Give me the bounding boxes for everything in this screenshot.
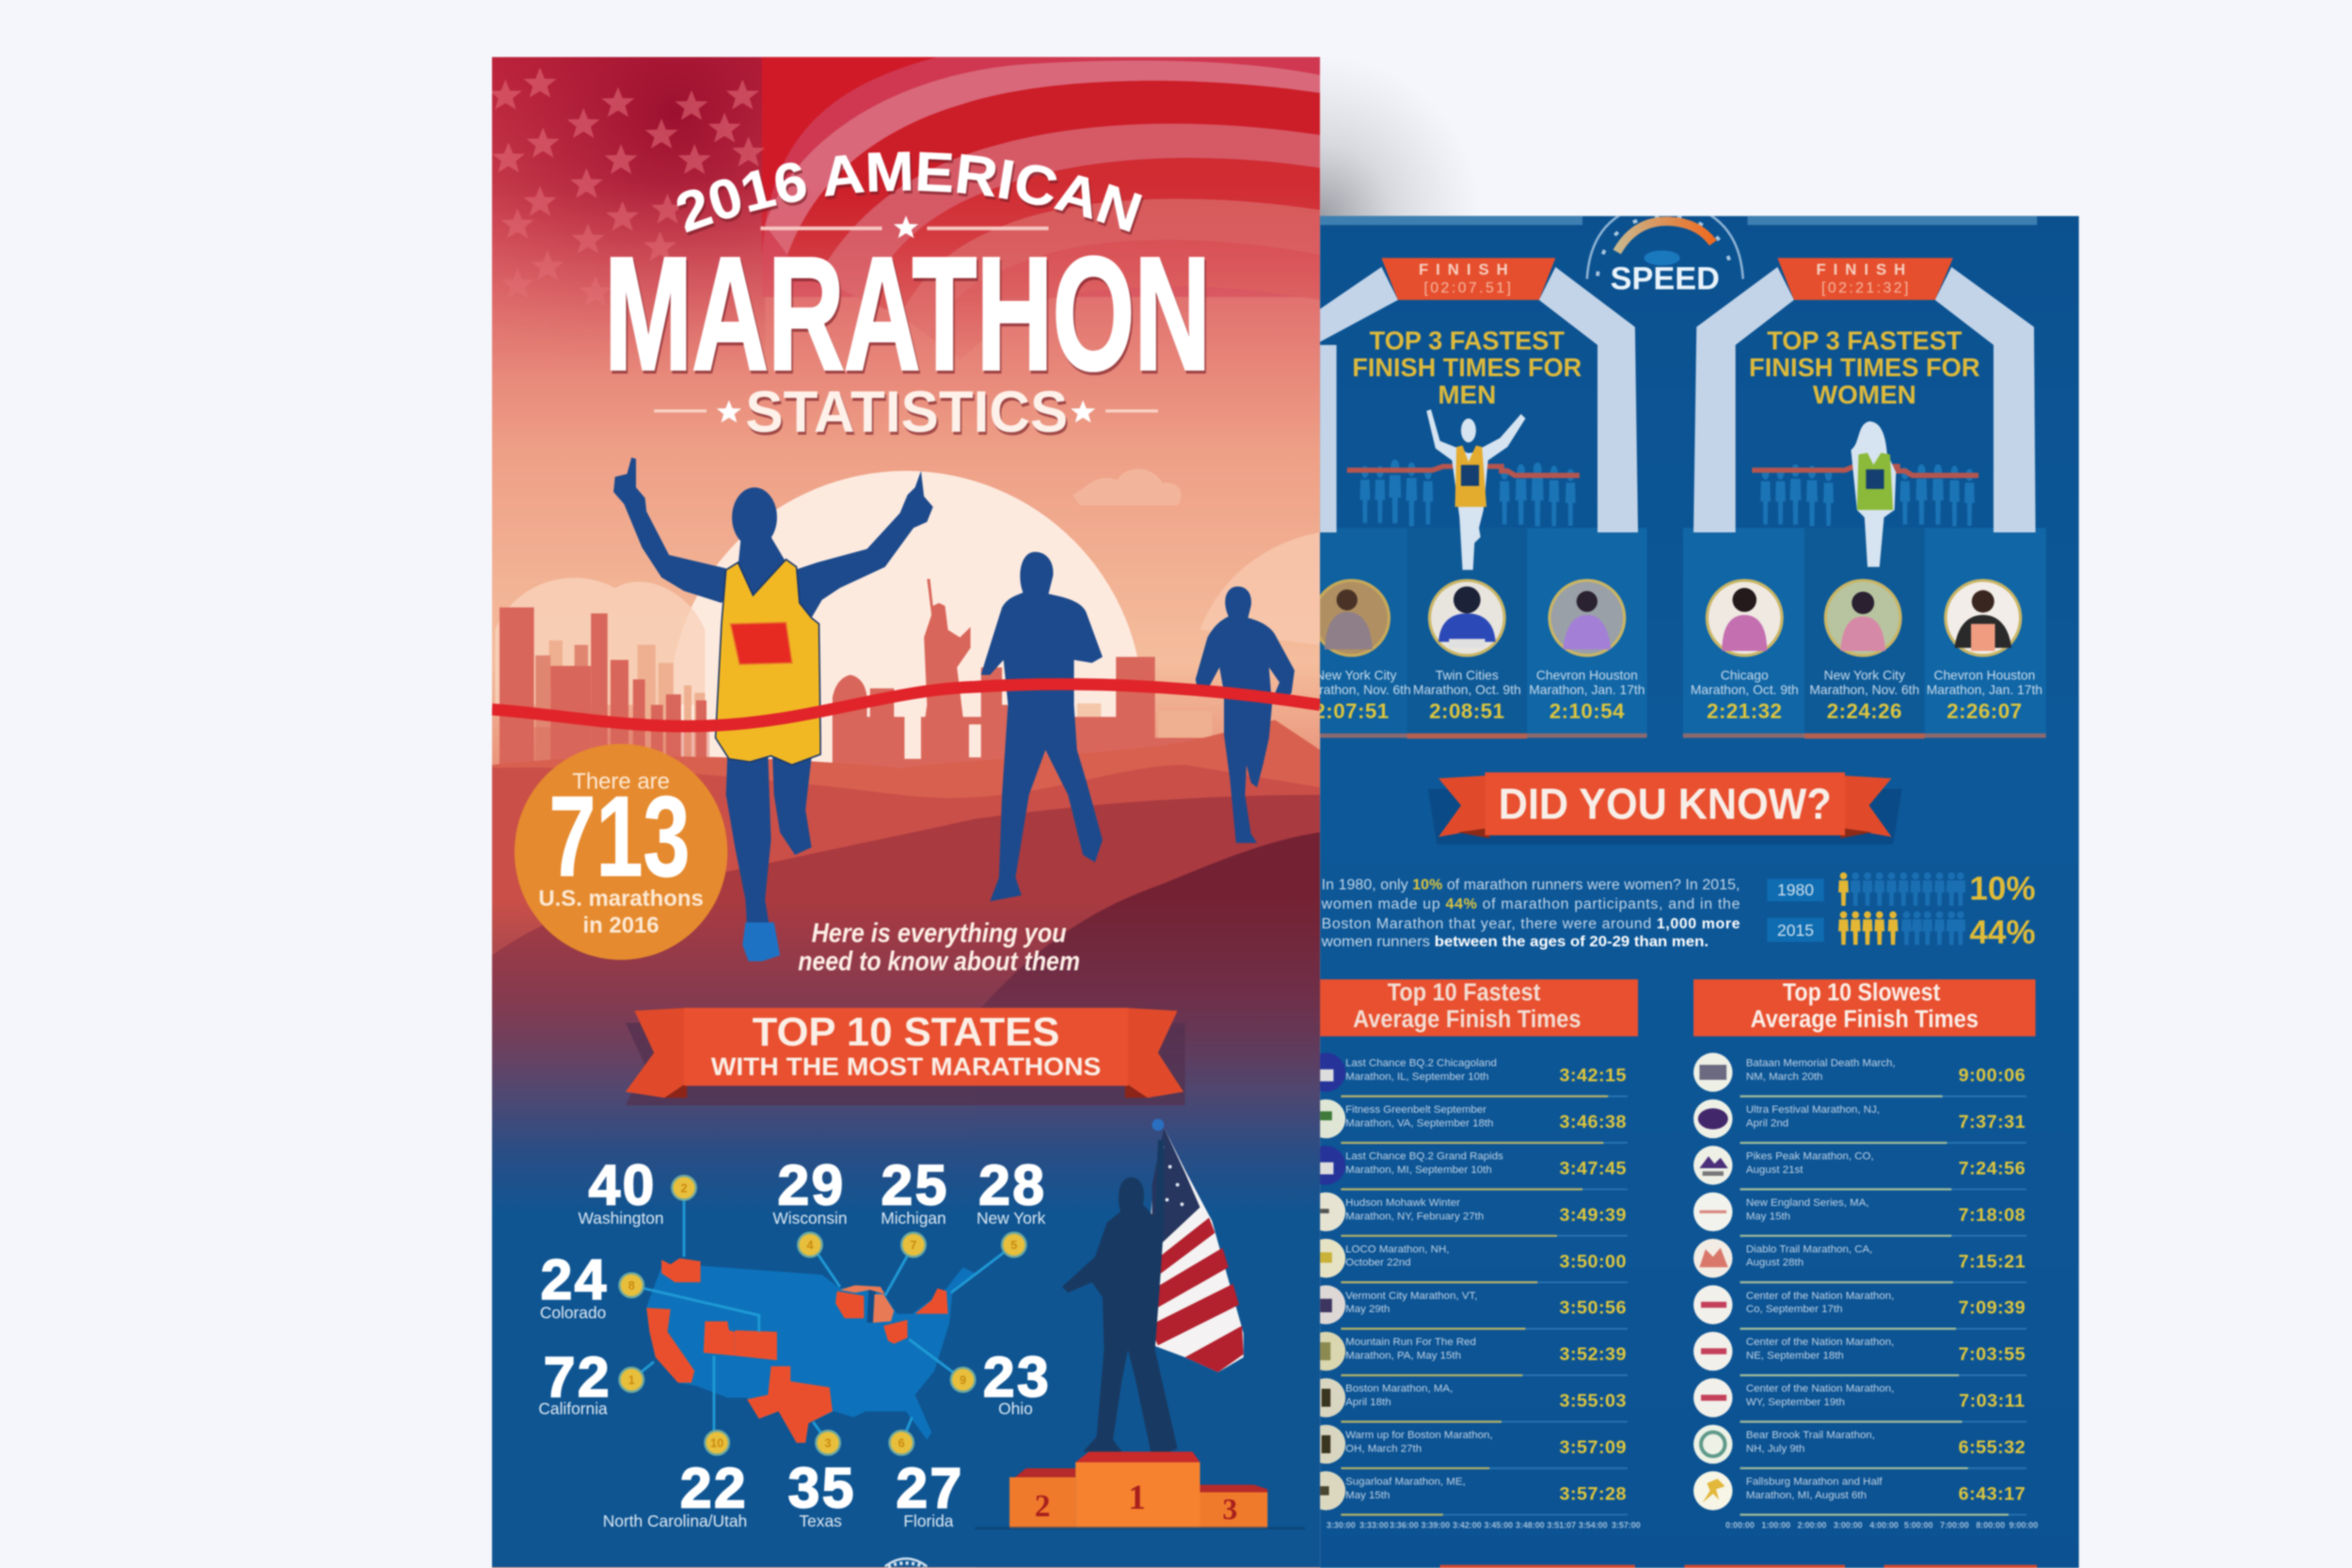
- state: michigan: 25: [881, 1152, 949, 1216]
- label: women 2: New York City: [1824, 667, 1905, 682]
- state: florida: [889, 1431, 964, 1530]
- row: fastest 9: 3:57:09: [1559, 1437, 1627, 1458]
- panel: left infographic page: [491, 56, 1321, 1568]
- row: slowest 1: 9:00:06: [1959, 1066, 2026, 1086]
- axis: fastest: 3:54:00: [1579, 1521, 1608, 1530]
- logo: bottom seal: [885, 1559, 927, 1566]
- chart: women share 2015: [1767, 911, 2036, 951]
- row: fastest 2: [1307, 1100, 1628, 1143]
- row: fastest 10: [1307, 1471, 1628, 1514]
- state: california: [538, 1344, 644, 1418]
- row: fastest 3: Last Chance BQ.2 Grand Rapids: [1345, 1150, 1503, 1162]
- row: fastest 7: [1307, 1332, 1628, 1375]
- tagline: [798, 918, 1080, 977]
- label: men 1: 2:07:51: [1313, 700, 1390, 723]
- chart: women share 1980: 1980: [1777, 880, 1814, 899]
- row: fastest 10: 3:57:28: [1559, 1483, 1627, 1504]
- state: ohio: 9: [960, 1373, 966, 1387]
- row: slowest 1: NM, March 20th: [1746, 1071, 1822, 1083]
- tagline: Here is everything you: [812, 918, 1067, 948]
- row: slowest 8: Center of the Nation Marathon,: [1746, 1384, 1894, 1395]
- label: women 3: Chevron Houston: [1933, 667, 2035, 682]
- row: fastest 7: 3:52:39: [1559, 1344, 1627, 1365]
- row: slowest 7: [1693, 1332, 2026, 1375]
- label: men 1: Marathon, Nov. 6th: [1301, 682, 1411, 697]
- row: slowest 6: Center of the Nation Marathon,: [1746, 1291, 1894, 1302]
- runner: third back: [1196, 586, 1295, 843]
- badge: 713 marathons: There are: [572, 769, 670, 795]
- axis: slowest: 5:00:00: [1904, 1521, 1933, 1530]
- axis: slowest: 0:00:00: [1725, 1521, 1755, 1530]
- finish tape men: [1347, 467, 1580, 475]
- row: fastest 9: [1307, 1425, 1628, 1468]
- label: women 2: [1810, 670, 1919, 719]
- axis: fastest: 3:33:00: [1359, 1521, 1389, 1530]
- state: washington: Washington: [579, 1209, 664, 1227]
- row: fastest 2: 3:46:38: [1559, 1112, 1627, 1132]
- state: north carolina and utah: 10: [710, 1436, 723, 1450]
- row: slowest 4: New England Series, MA,: [1746, 1197, 1869, 1209]
- state: california: 1: [628, 1373, 635, 1387]
- label: women 2: 2:24:26: [1827, 700, 1902, 723]
- row: slowest 10: [1693, 1471, 2026, 1514]
- label: women 1: 2:21:32: [1707, 700, 1782, 723]
- panel: men podium columns: [1320, 528, 1647, 738]
- label: men 3: Chevron Houston: [1536, 667, 1638, 682]
- banner: top 10 states: [626, 1007, 1185, 1105]
- heading: top 3 men: MEN: [1438, 380, 1496, 409]
- header: top 10 slowest: Top 10 Slowest: [1783, 977, 1941, 1006]
- row: slowest 6: 7:09:39: [1959, 1298, 2026, 1319]
- axis: slowest: 4:00:00: [1869, 1521, 1899, 1530]
- row: slowest 6: Co, September 17th: [1746, 1304, 1843, 1315]
- axis: fastest: 3:39:00: [1421, 1521, 1450, 1530]
- row: fastest 4: 3:49:39: [1559, 1205, 1627, 1226]
- row: fastest 5: [1307, 1239, 1628, 1282]
- row: fastest 1: Last Chance BQ.2 Chicagoland: [1345, 1058, 1497, 1069]
- row: slowest 7: 7:03:55: [1959, 1344, 2026, 1365]
- state: new york: 5: [1010, 1238, 1017, 1252]
- finish tape women: [1752, 467, 1979, 475]
- header: top 10 fastest: [1320, 977, 1638, 1037]
- state: texas: Texas: [799, 1512, 842, 1530]
- row: fastest 10: May 15th: [1345, 1490, 1390, 1501]
- row: slowest 5: Diablo Trail Marathon, CA,: [1746, 1243, 1872, 1255]
- text: did you know paragraph: [1321, 878, 1740, 950]
- row: fastest 8: April 18th: [1345, 1397, 1391, 1408]
- row: slowest 10: 6:43:17: [1959, 1483, 2026, 1504]
- row: fastest 7: Marathon, PA, May 15th: [1345, 1351, 1461, 1362]
- heading: top 3 women: FINISH TIMES FOR: [1749, 353, 1980, 382]
- title: 2016 American: 2016 AMERICAN: [675, 150, 1144, 236]
- tagline: need to know about them: [798, 947, 1080, 977]
- state: michigan: Michigan: [881, 1209, 946, 1227]
- state: wisconsin: [772, 1152, 848, 1257]
- state: florida: 27: [896, 1455, 964, 1519]
- row: fastest 4: Marathon, NY, February 27th: [1345, 1211, 1484, 1222]
- row: slowest 5: August 28th: [1746, 1258, 1804, 1269]
- row: slowest 9: 6:55:32: [1959, 1437, 2026, 1458]
- row: fastest 5: 3:50:00: [1559, 1251, 1627, 1272]
- state: texas: 35: [788, 1455, 856, 1519]
- row: slowest 10: Marathon, MI, August 6th: [1746, 1490, 1867, 1501]
- chart: women share 1980: [1767, 871, 2036, 908]
- label: men 2: Marathon, Oct. 9th: [1413, 682, 1521, 697]
- label: men 3: 2:10:54: [1549, 700, 1625, 723]
- state: washington: 40: [589, 1152, 657, 1216]
- podium: 1: [1128, 1478, 1146, 1516]
- row: slowest 3: [1693, 1146, 2026, 1189]
- row: fastest 1: 3:42:15: [1559, 1066, 1627, 1086]
- row: slowest 8: 7:03:11: [1959, 1391, 2026, 1412]
- row: slowest 2: April 2nd: [1746, 1117, 1788, 1129]
- runner: main with vest: [613, 457, 933, 961]
- label: women 1: [1691, 670, 1799, 719]
- photo: runner men 1: [1312, 578, 1391, 657]
- city skyline: [500, 578, 1221, 768]
- state: ohio: Ohio: [998, 1400, 1033, 1418]
- state: new york: New York: [977, 1209, 1046, 1227]
- row: slowest 3: Pikes Peak Marathon, CO,: [1746, 1150, 1874, 1162]
- row: fastest 9: OH, March 27th: [1345, 1443, 1422, 1454]
- row: slowest 10: Fallsburg Marathon and Half: [1746, 1476, 1883, 1487]
- state: wisconsin: Wisconsin: [772, 1209, 848, 1227]
- banner: did you know: DID YOU KNOW?: [1499, 780, 1832, 829]
- state: wisconsin: 4: [806, 1238, 814, 1252]
- label: women 1: Marathon, Oct. 9th: [1691, 682, 1799, 697]
- runner: second: [981, 552, 1103, 901]
- banner: did you know: [1428, 772, 1902, 845]
- row: slowest 3: 7:24:56: [1959, 1158, 2026, 1179]
- banner: top 10 states: WITH THE MOST MARATHONS: [711, 1052, 1101, 1081]
- axis: slowest: 3:00:00: [1834, 1521, 1863, 1530]
- axis: fastest: 3:48:00: [1516, 1521, 1545, 1530]
- label: men 2: [1413, 670, 1521, 719]
- finish ribbon: [492, 684, 1320, 726]
- row: slowest 9: [1693, 1425, 2026, 1468]
- axis: slowest: [1725, 1521, 2038, 1530]
- label: men 1: [1319, 670, 1411, 719]
- header strip: [1320, 216, 2037, 225]
- shadow cast on page: [1320, 54, 1482, 216]
- state: north carolina and utah: North Carolina/Utah: [603, 1512, 747, 1530]
- state: washington: 2: [680, 1181, 688, 1196]
- title: statistics: STATISTICS: [745, 380, 1068, 445]
- bottom red strip: [1440, 1565, 2037, 1567]
- ground hills and road: [492, 720, 1320, 1567]
- text: did you know paragraph: women made up 44% of marathon participants, and in the: [1321, 896, 1740, 912]
- row: slowest 4: [1693, 1193, 2026, 1236]
- photo: runner women 3: [1944, 578, 2022, 657]
- podium: 3: [1222, 1493, 1237, 1526]
- banner: top 10 states: TOP 10 STATES: [753, 1009, 1059, 1054]
- row: fastest 6: Vermont City Marathon, VT,: [1345, 1291, 1477, 1302]
- sun and clouds: [495, 468, 1320, 944]
- row: slowest 6: [1693, 1285, 2026, 1329]
- header: top 10 slowest: [1693, 977, 2036, 1037]
- row: fastest 4: Hudson Mohawk Winter: [1345, 1197, 1460, 1209]
- panel: men finish arch: [1320, 258, 1638, 532]
- text: did you know paragraph: Boston Marathon that year, there were around 1,000 more: [1322, 916, 1740, 932]
- header: top 10 fastest: Top 10 Fastest: [1388, 977, 1541, 1006]
- row: fastest 8: Boston Marathon, MA,: [1345, 1384, 1453, 1395]
- label: women 3: Marathon, Jan. 17th: [1927, 682, 2042, 697]
- state: wisconsin: 29: [777, 1152, 846, 1216]
- heading: speed: SPEED: [1611, 261, 1720, 297]
- state: new york: 28: [978, 1152, 1046, 1216]
- axis: slowest: 2:00:00: [1798, 1521, 1826, 1530]
- panel: right infographic page: [1301, 204, 2079, 1568]
- axis: slowest: 8:00:00: [1976, 1521, 2005, 1530]
- row: slowest 9: NH, July 9th: [1746, 1443, 1804, 1454]
- state: ohio: [951, 1344, 1051, 1418]
- row: fastest 3: Marathon, MI, September 10th: [1345, 1164, 1492, 1176]
- panel: men finish arch: [02:07.51]: [1423, 280, 1513, 296]
- axis: fastest: [1327, 1521, 1641, 1530]
- row: fastest 1: Marathon, IL, September 10th: [1345, 1071, 1489, 1083]
- state: north carolina and utah: [603, 1431, 748, 1530]
- row: slowest 2: Ultra Festival Marathon, NJ,: [1746, 1104, 1880, 1116]
- heading: top 3 women: [1750, 330, 1980, 404]
- runner figure women: [1851, 421, 1896, 567]
- text: did you know paragraph: In 1980, only 10% of marathon runners were women? In 2015,: [1322, 878, 1740, 894]
- podium: [975, 1451, 1305, 1528]
- crowd silhouettes men: [1359, 459, 1576, 527]
- row: fastest 6: [1307, 1285, 1628, 1329]
- state: colorado: [540, 1247, 644, 1323]
- icon: speedometer: [1584, 214, 1745, 280]
- row: fastest 6: 3:50:56: [1559, 1298, 1627, 1319]
- row: slowest 4: 7:18:08: [1959, 1205, 2026, 1226]
- state: florida: Florida: [903, 1512, 954, 1530]
- chart: women share 1980: 10%: [1969, 871, 2036, 908]
- runner figure men: [1426, 409, 1525, 570]
- axis: fastest: 3:42:00: [1453, 1521, 1482, 1530]
- axis: fastest: 3:51:07: [1547, 1521, 1576, 1530]
- map callout lines: [631, 1193, 1014, 1443]
- panel: women finish arch: [1693, 258, 2036, 532]
- label: women 3: 2:26:07: [1947, 700, 2023, 723]
- axis: slowest: 1:00:00: [1761, 1521, 1790, 1530]
- heading: top 3 women: TOP 3 FASTEST: [1767, 326, 1962, 356]
- row: slowest 2: [1693, 1100, 2026, 1143]
- row: fastest 10: Sugarloaf Marathon, ME,: [1345, 1476, 1466, 1487]
- state: north carolina and utah: 22: [680, 1455, 748, 1519]
- label: men 2: Twin Cities: [1436, 667, 1499, 682]
- axis: fastest: 3:45:00: [1484, 1521, 1513, 1530]
- axis: slowest: 9:00:00: [2009, 1521, 2038, 1530]
- title divider with star: [760, 215, 1048, 238]
- photo: runner men 2: [1428, 578, 1506, 657]
- axis: slowest: 7:00:00: [1940, 1521, 1969, 1530]
- row: fastest 3: 3:47:45: [1559, 1158, 1627, 1179]
- row: slowest 5: [1693, 1239, 2026, 1282]
- label: women 2: Marathon, Nov. 6th: [1809, 682, 1919, 697]
- row: fastest 8: [1307, 1378, 1628, 1422]
- row: fastest 3: [1307, 1146, 1628, 1189]
- heading: top 3 men: [1353, 330, 1582, 404]
- row: fastest 1: [1307, 1053, 1628, 1097]
- label: men 2: 2:08:51: [1429, 700, 1504, 723]
- text: did you know paragraph: women runners between the ages of 20-29 than men.: [1321, 934, 1708, 950]
- badge: 713 marathons: in 2016: [583, 913, 660, 939]
- state: michigan: [881, 1152, 949, 1257]
- panel: men finish arch: FINISH: [1419, 261, 1516, 278]
- state: texas: [788, 1431, 856, 1530]
- row: fastest 5: October 22nd: [1345, 1258, 1411, 1269]
- chart: women share 2015: 2015: [1777, 921, 1814, 940]
- row: slowest 3: August 21st: [1746, 1164, 1804, 1176]
- flag backdrop: [489, 57, 1320, 447]
- row: slowest 8: [1693, 1378, 2026, 1422]
- row: slowest 7: Center of the Nation Marathon,: [1746, 1337, 1894, 1348]
- label: women 3: [1927, 670, 2043, 719]
- row: slowest 8: WY, September 19th: [1746, 1397, 1845, 1408]
- heading: top 3 women: WOMEN: [1813, 380, 1916, 409]
- row: slowest 9: Bear Brook Trail Marathon,: [1746, 1430, 1875, 1441]
- row: slowest 1: Bataan Memorial Death March,: [1746, 1058, 1896, 1069]
- state: colorado: 24: [541, 1247, 609, 1311]
- row: fastest 6: May 29th: [1345, 1304, 1390, 1315]
- photo: runner women 2: [1824, 578, 1902, 657]
- label: men 3: Marathon, Jan. 17th: [1529, 682, 1645, 697]
- row: fastest 8: 3:55:03: [1559, 1391, 1627, 1412]
- axis: fastest: 3:30:00: [1327, 1521, 1356, 1530]
- label: men 3: [1529, 670, 1645, 719]
- row: slowest 7: NE, September 18th: [1746, 1351, 1844, 1362]
- state: michigan: 7: [910, 1238, 917, 1252]
- chart: women share 2015: 44%: [1969, 914, 2036, 951]
- row: slowest 5: 7:15:21: [1959, 1251, 2026, 1272]
- header: top 10 fastest: Average Finish Times: [1353, 1005, 1581, 1033]
- badge: 713 marathons: 713: [549, 772, 690, 900]
- crowd silhouettes women: [1760, 464, 1975, 526]
- state: texas: 3: [825, 1436, 832, 1450]
- state: ohio: 23: [983, 1344, 1051, 1408]
- row: slowest 4: May 15th: [1746, 1211, 1790, 1222]
- map: united states: [646, 1259, 975, 1443]
- heading: top 3 men: FINISH TIMES FOR: [1352, 353, 1581, 382]
- badge: 713 marathons: [515, 744, 727, 959]
- row: slowest 2: 7:37:31: [1959, 1112, 2026, 1132]
- row: fastest 5: LOCO Marathon, NH,: [1345, 1243, 1449, 1255]
- title: marathon: MARATHON: [605, 225, 1211, 404]
- row: fastest 7: Mountain Run For The Red: [1345, 1337, 1476, 1348]
- state: colorado: 8: [628, 1278, 635, 1292]
- label: women 1: Chicago: [1721, 667, 1769, 682]
- photo: runner women 1: [1706, 578, 1784, 657]
- state: california: 72: [544, 1344, 612, 1408]
- state: new york: [977, 1152, 1046, 1257]
- state: colorado: Colorado: [540, 1304, 606, 1323]
- row: fastest 2: Fitness Greenbelt September: [1345, 1104, 1486, 1116]
- title: statistics: [654, 380, 1158, 445]
- panel: women finish arch: [02:21:32]: [1821, 280, 1911, 296]
- panel: women finish arch: FINISH: [1816, 261, 1913, 278]
- panel: women podium columns: [1683, 528, 2046, 738]
- label: men 1: New York City: [1315, 667, 1397, 682]
- badge: 713 marathons: U.S. marathons: [538, 886, 704, 911]
- axis: fastest: 3:36:00: [1390, 1521, 1419, 1530]
- heading: top 3 men: TOP 3 FASTEST: [1370, 326, 1565, 356]
- axis: fastest: 3:57:00: [1612, 1521, 1641, 1530]
- state: washington: [579, 1152, 696, 1227]
- podium: 2: [1035, 1489, 1050, 1524]
- state: florida: 6: [898, 1436, 905, 1450]
- row: fastest 9: Warm up for Boston Marathon,: [1345, 1430, 1493, 1441]
- row: fastest 4: [1307, 1193, 1628, 1236]
- header: top 10 slowest: Average Finish Times: [1751, 1005, 1979, 1033]
- illustration: man with flag: [1062, 1118, 1244, 1458]
- row: slowest 1: [1693, 1053, 2026, 1097]
- photo: runner men 3: [1548, 578, 1626, 657]
- state: california: California: [538, 1400, 608, 1418]
- row: fastest 2: Marathon, VA, September 18th: [1345, 1117, 1493, 1129]
